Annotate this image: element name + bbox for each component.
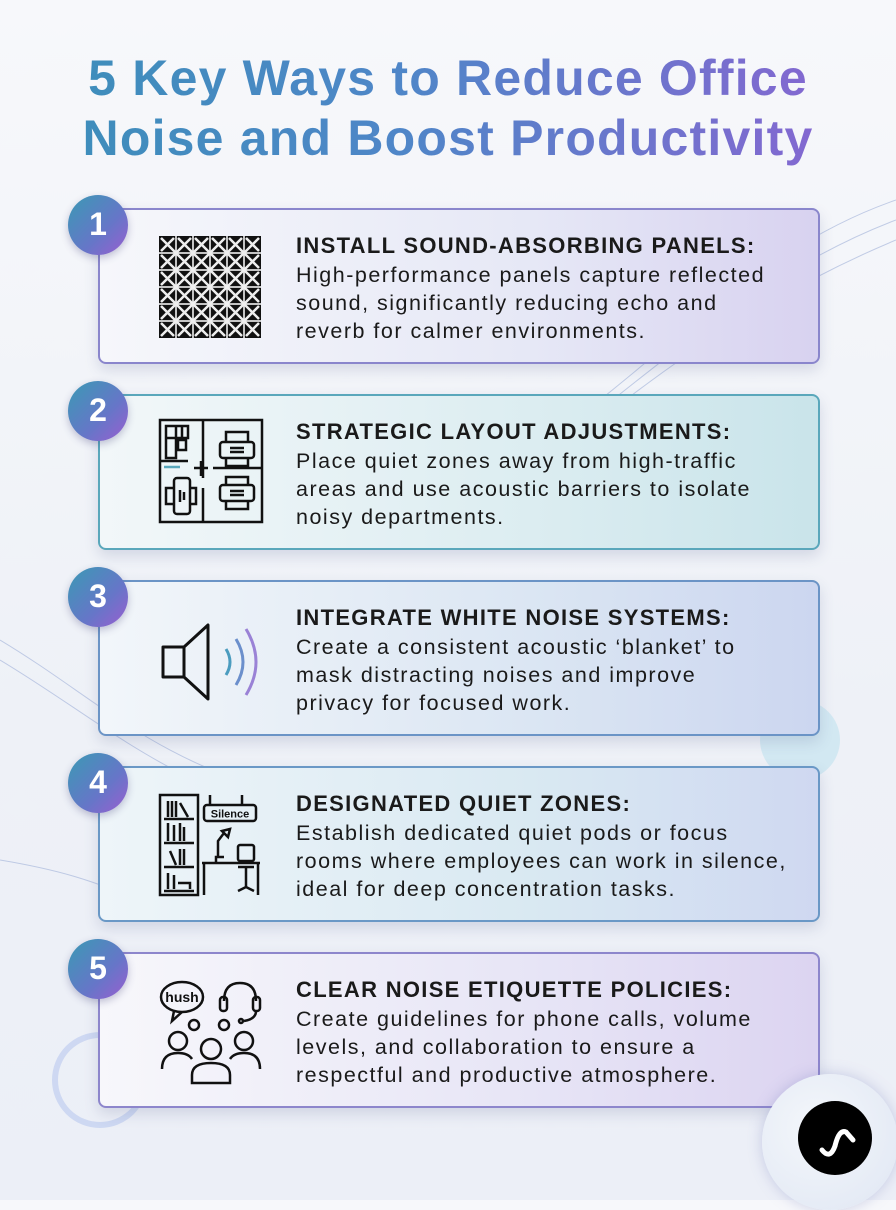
badge 3 (68, 567, 128, 627)
text block 1: sound, significantly reducing echo and (296, 291, 718, 315)
text block 1 (296, 233, 765, 343)
text block 1: INSTALL SOUND-ABSORBING PANELS: (296, 233, 756, 258)
panel: 5 etiquette (98, 952, 820, 1108)
badge 5: 5 (89, 950, 107, 986)
text block 3: privacy for focused work. (296, 691, 571, 715)
badge 4: 4 (89, 764, 107, 800)
text block 2: noisy departments. (296, 505, 505, 529)
text block 2: STRATEGIC LAYOUT ADJUSTMENTS: (296, 419, 731, 444)
icon: silence room: Silence (211, 808, 249, 820)
text block 5 (296, 977, 752, 1087)
text block 1: High-performance panels capture reflected (296, 263, 765, 287)
icon: people hush (160, 980, 262, 1084)
panel: 4 quiet zones (98, 766, 820, 922)
badge 5 (68, 939, 128, 999)
icon: speaker (162, 623, 258, 700)
panel: 3 white noise (98, 580, 820, 736)
text block 4: rooms where employees can work in silence, (296, 849, 787, 873)
panel: 1 sound panels (98, 208, 820, 364)
badge 4 (68, 753, 128, 813)
logo (762, 1074, 896, 1210)
badge 1: 1 (89, 206, 107, 242)
text block 2 (296, 419, 751, 529)
text block 2: areas and use acoustic barriers to isolate (296, 477, 751, 501)
text block 5: Create guidelines for phone calls, volume (296, 1007, 752, 1031)
text block 3 (296, 605, 736, 715)
title: Noise and Boost Productivity (83, 110, 813, 166)
icon: acoustic panel (159, 236, 261, 338)
text block 4: Establish dedicated quiet pods or focus (296, 821, 729, 845)
text block 2: Place quiet zones away from high-traffic (296, 449, 737, 473)
text block 1: reverb for calmer environments. (296, 319, 646, 343)
title (0, 48, 896, 168)
text block 5: CLEAR NOISE ETIQUETTE POLICIES: (296, 977, 732, 1002)
badge 2: 2 (89, 392, 107, 428)
panel: 2 layout (98, 394, 820, 550)
text block 4 (296, 791, 787, 901)
text block 3: Create a consistent acoustic ‘blanket’ to (296, 635, 736, 659)
icon: people hush: hush (165, 989, 199, 1005)
text block 4: DESIGNATED QUIET ZONES: (296, 791, 631, 816)
text block 3: INTEGRATE WHITE NOISE SYSTEMS: (296, 605, 731, 630)
text block 5: respectful and productive atmosphere. (296, 1063, 717, 1087)
badge 2 (68, 381, 128, 441)
badge 3: 3 (89, 578, 107, 614)
title: 5 Key Ways to Reduce Office (88, 50, 808, 106)
text block 3: mask distracting noises and improve (296, 663, 696, 687)
badge 1 (68, 195, 128, 255)
icon: silence room (158, 794, 260, 896)
text block 5: levels, and collaboration to ensure a (296, 1035, 696, 1059)
text block 4: ideal for deep concentration tasks. (296, 877, 676, 901)
icon: floor plan (158, 418, 264, 524)
